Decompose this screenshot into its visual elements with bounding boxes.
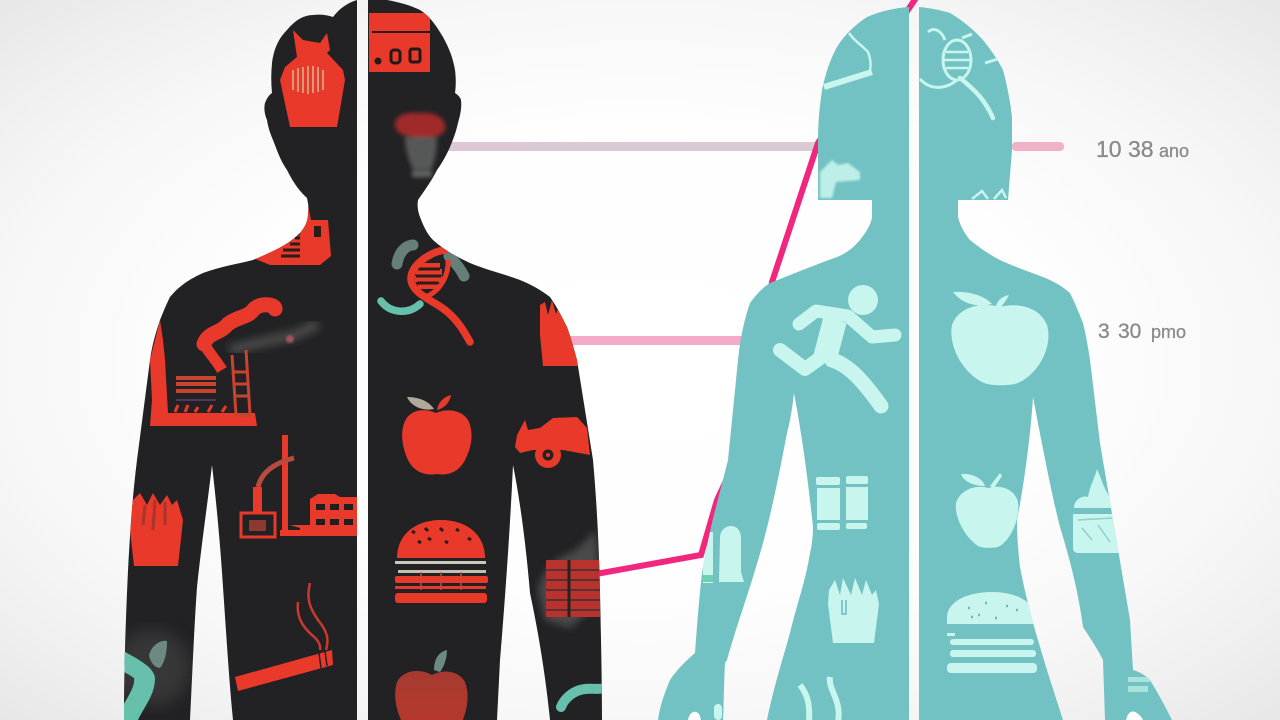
icon: faded tree: [820, 160, 860, 198]
icons clipped to teal body: [688, 30, 1150, 720]
icon: faded light bulb: [395, 113, 445, 177]
icon: calendar: [369, 13, 430, 72]
icon: factory with smoke: [150, 305, 318, 426]
icon: neck building: [256, 206, 331, 265]
teal body silhouette: [658, 7, 1172, 720]
icon: cigarette in head: [824, 33, 872, 87]
icon: DNA helix: [920, 30, 998, 118]
dark human figure with risk icons: [114, 0, 606, 720]
icon: DNA helix: [381, 245, 470, 342]
icon: cupcake: [280, 30, 345, 127]
icon: burger: [395, 520, 488, 603]
icon: burger: [947, 592, 1037, 673]
icon: faded apple: [395, 650, 468, 720]
icon: small apple: [956, 473, 1018, 548]
icon: large apple: [951, 292, 1048, 385]
icon: faded crate: [538, 530, 602, 628]
teal human figure with healthy icons: [658, 7, 1172, 720]
label: upper measurement: 10 38: [1096, 136, 1154, 162]
connector lines: [445, 0, 1064, 574]
icon: industrial plant: [241, 435, 358, 537]
icon: running person: [780, 285, 895, 406]
dark body silhouette: [124, 0, 602, 720]
icon: truck: [515, 417, 590, 468]
label: upper measurement: ano: [1159, 141, 1189, 161]
icon: french fries: [130, 493, 183, 566]
icon: salt boxes: [816, 476, 868, 530]
icon: cup with flames: [1073, 469, 1120, 553]
icon: shakers: [703, 526, 744, 583]
icon: fries: [828, 578, 879, 643]
icon: raised hand: [540, 300, 578, 366]
label: lower measurement: 3: [1098, 320, 1110, 343]
icon: red apple: [402, 395, 472, 474]
icon: finger marks: [688, 711, 1143, 720]
icon: cigarette with smoke: [235, 583, 333, 691]
label: lower measurement: 30: [1118, 320, 1141, 343]
icon: faded teal leaf: [124, 629, 191, 720]
icon: steam lines: [800, 677, 839, 720]
icons clipped to dark body: [114, 13, 606, 720]
label: lower measurement: pmo: [1151, 322, 1186, 342]
icon: teal shape bottom right: [561, 688, 606, 707]
icon: chevrons: [972, 190, 1006, 199]
icon: wrist band: [1128, 677, 1150, 692]
